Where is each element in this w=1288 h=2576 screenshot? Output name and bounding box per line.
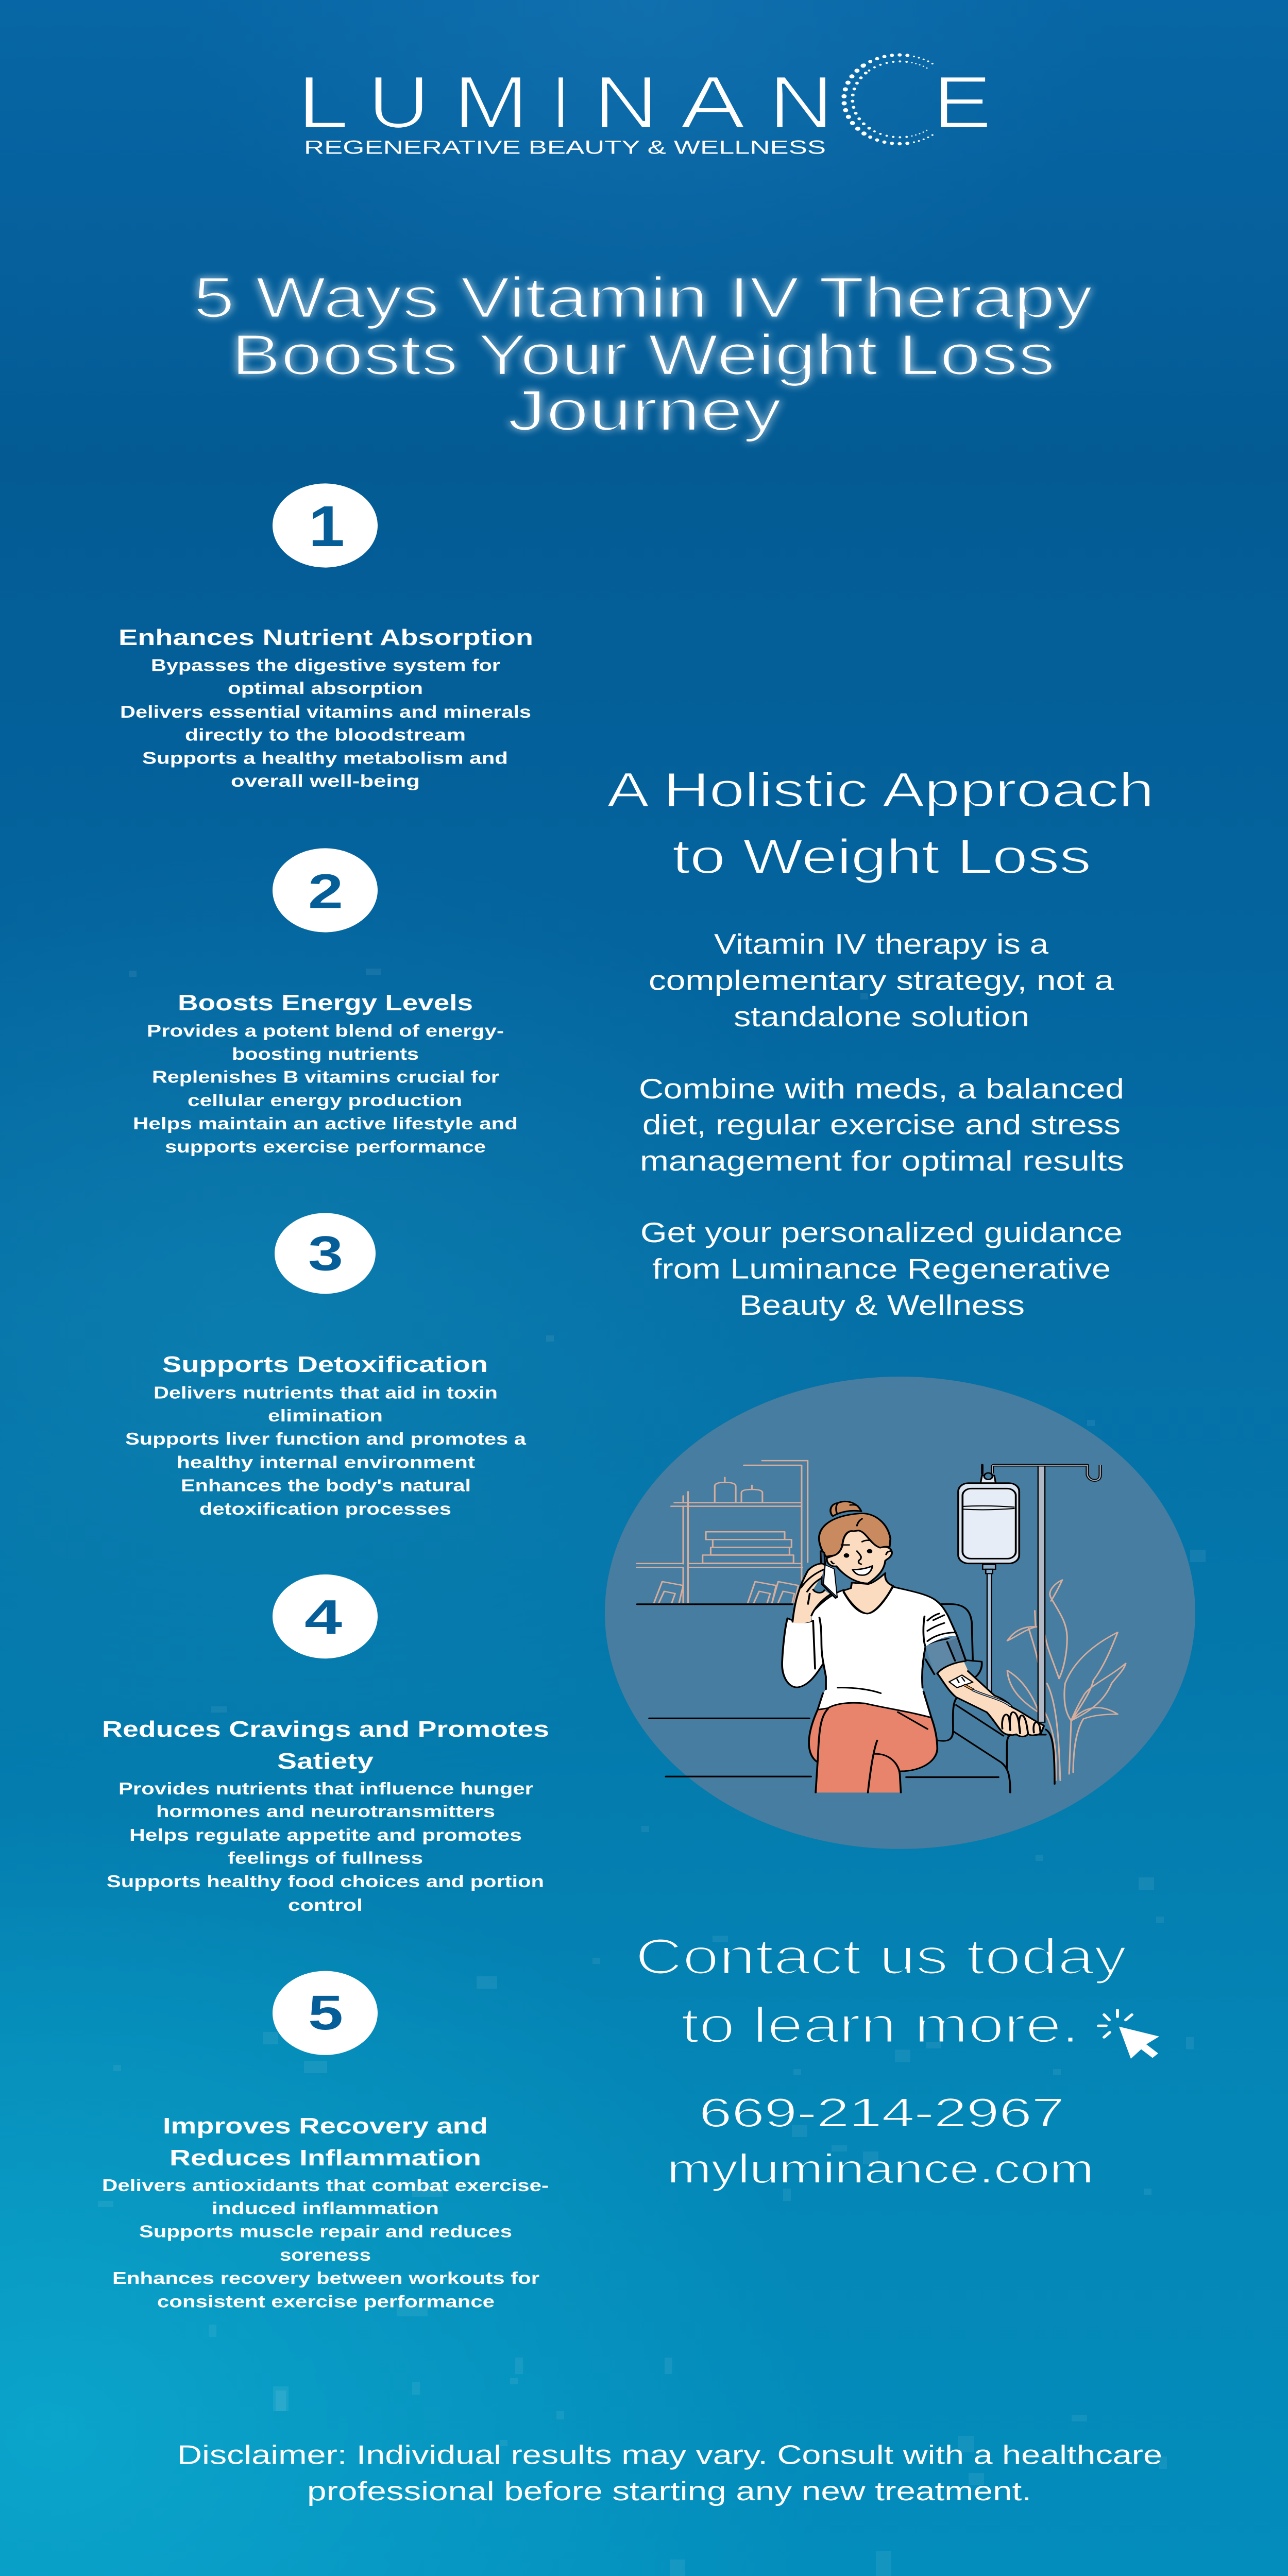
panel: way 2 bbox=[133, 848, 518, 1157]
text block 3: elimination bbox=[268, 1406, 383, 1426]
text block 5: Enhances recovery between workouts for bbox=[112, 2269, 539, 2288]
panel: way 4 bbox=[102, 1574, 549, 1915]
website: myluminance.com bbox=[667, 2146, 1094, 2192]
holistic paragraph 1 bbox=[649, 929, 1114, 1032]
holistic paragraph 2: diet, regular exercise and stress bbox=[642, 1109, 1121, 1141]
contact heading bbox=[635, 1929, 1127, 2053]
text block 2 bbox=[133, 1022, 518, 1157]
number badge 4: 4 bbox=[304, 1590, 342, 1645]
logo wordmark bbox=[297, 60, 992, 144]
text block 2: cellular energy production bbox=[188, 1091, 462, 1110]
heading 4: Reduces Cravings and Promotes bbox=[102, 1716, 549, 1742]
holistic paragraph 3: Beauty & Wellness bbox=[739, 1290, 1025, 1321]
panel: way 5 bbox=[102, 1971, 549, 2311]
text block 4: Provides nutrients that influence hunger bbox=[118, 1780, 533, 1799]
number badge 4 bbox=[273, 1574, 378, 1658]
logo wordmark: M bbox=[453, 60, 529, 144]
text block 2: Replenishes B vitamins crucial for bbox=[152, 1067, 499, 1087]
text block 5: consistent exercise performance bbox=[157, 2292, 495, 2311]
number badge 3: 3 bbox=[308, 1226, 343, 1281]
number badge 3 bbox=[275, 1213, 376, 1294]
heading 4 bbox=[102, 1716, 549, 1774]
number badge 5: 5 bbox=[308, 1986, 343, 2040]
title: Boosts Your Weight Loss bbox=[231, 323, 1055, 387]
logo wordmark: N bbox=[594, 60, 658, 144]
heading 5: Improves Recovery and bbox=[163, 2113, 488, 2139]
title: 5 Ways Vitamin IV Therapy bbox=[193, 265, 1093, 330]
text block 5: Supports muscle repair and reduces bbox=[139, 2222, 512, 2241]
woman head, phone and hand bbox=[792, 1501, 893, 1623]
panel: way 1 bbox=[118, 483, 533, 791]
text block 4: Helps regulate appetite and promotes bbox=[129, 1826, 522, 1845]
text block 4: feelings of fullness bbox=[228, 1849, 423, 1868]
hair bun bbox=[831, 1501, 861, 1516]
text block 1: Supports a healthy metabolism and bbox=[142, 749, 508, 768]
text block 2: Provides a potent blend of energy- bbox=[147, 1022, 504, 1041]
logo wordmark: E bbox=[933, 60, 992, 144]
holistic paragraph 1: complementary strategy, not a bbox=[649, 965, 1114, 996]
text block 2: supports exercise performance bbox=[165, 1138, 486, 1157]
heading 1: Enhances Nutrient Absorption bbox=[118, 624, 533, 650]
illustration backdrop circle bbox=[605, 1377, 1195, 1849]
trousers bbox=[809, 1703, 937, 1792]
title: Journey bbox=[507, 378, 782, 443]
text block 1: optimal absorption bbox=[228, 679, 423, 698]
logo bbox=[297, 55, 992, 158]
panel: way 3 bbox=[125, 1213, 527, 1519]
number badge 2: 2 bbox=[308, 864, 343, 919]
holistic paragraph 3: from Luminance Regenerative bbox=[652, 1253, 1111, 1285]
logo wordmark: L bbox=[297, 60, 349, 144]
text block 3: detoxification processes bbox=[199, 1500, 451, 1519]
text block 1: overall well-being bbox=[231, 772, 420, 791]
holistic heading bbox=[607, 762, 1154, 884]
text block 2: boosting nutrients bbox=[232, 1045, 419, 1064]
holistic paragraph 2: Combine with meds, a balanced bbox=[639, 1073, 1124, 1105]
holistic heading: to Weight Loss bbox=[672, 829, 1091, 884]
contact heading: to learn more. bbox=[681, 1997, 1079, 2053]
text block 3: Supports liver function and promotes a bbox=[125, 1430, 527, 1449]
IV pole bbox=[982, 1465, 1100, 1722]
blood pressure cuff bbox=[925, 1636, 966, 1674]
forearm with IV line bbox=[937, 1661, 1044, 1737]
white top bbox=[782, 1587, 957, 1718]
text block 3 bbox=[125, 1383, 527, 1519]
face bbox=[827, 1531, 892, 1583]
neck bbox=[843, 1573, 893, 1614]
text block 4: Supports healthy food choices and portion bbox=[107, 1872, 544, 1891]
chair bbox=[938, 1604, 1055, 1792]
text block 1: Delivers essential vitamins and minerals bbox=[120, 703, 531, 722]
woman lower body bbox=[782, 1587, 1044, 1792]
holistic paragraph 3: Get your personalized guidance bbox=[640, 1217, 1123, 1249]
phone bbox=[821, 1551, 837, 1598]
number badge 1: 1 bbox=[309, 494, 345, 558]
text block 4: control bbox=[288, 1896, 363, 1915]
disclaimer: Disclaimer: Individual results may vary. Consult with a healthcare bbox=[177, 2440, 1162, 2470]
phone number: 669-214-2967 bbox=[699, 2090, 1064, 2136]
bookshelf and room lines bbox=[637, 1461, 998, 1777]
number badge 2 bbox=[273, 848, 378, 933]
logo wordmark: U bbox=[368, 60, 430, 144]
text block 5: soreness bbox=[280, 2246, 371, 2265]
holistic paragraph 3 bbox=[640, 1217, 1123, 1321]
holistic heading: A Holistic Approach bbox=[607, 762, 1154, 817]
text block 2: Helps maintain an active lifestyle and bbox=[133, 1114, 518, 1133]
heading 3: Supports Detoxification bbox=[162, 1351, 488, 1377]
plant bbox=[1007, 1580, 1126, 1781]
icon: cursor click bbox=[1098, 2010, 1159, 2059]
text block 1: directly to the bloodstream bbox=[185, 725, 466, 745]
text block 5: Delivers antioxidants that combat exercise- bbox=[102, 2176, 549, 2195]
facial features bbox=[831, 1504, 891, 1575]
text block 4: hormones and neurotransmitters bbox=[156, 1802, 495, 1821]
logo dotted letter C bbox=[844, 55, 934, 144]
logo wordmark: N bbox=[769, 60, 834, 144]
contact heading: Contact us today bbox=[635, 1929, 1127, 1985]
heading 2: Boosts Energy Levels bbox=[178, 990, 473, 1015]
call to action bbox=[635, 1929, 1159, 2192]
heading 4: Satiety bbox=[277, 1748, 374, 1774]
text block 1 bbox=[120, 656, 531, 791]
text block 3: healthy internal environment bbox=[177, 1453, 475, 1472]
disclaimer bbox=[177, 2440, 1162, 2506]
IV bag bbox=[958, 1473, 1019, 1573]
text block 3: Delivers nutrients that aid in toxin bbox=[154, 1383, 498, 1402]
hair bbox=[819, 1513, 890, 1556]
text block 5 bbox=[102, 2176, 549, 2311]
logo wordmark: I bbox=[551, 60, 570, 144]
holistic paragraph 1: standalone solution bbox=[734, 1001, 1029, 1032]
text block 4 bbox=[107, 1780, 544, 1915]
holistic paragraph 2 bbox=[639, 1073, 1124, 1177]
text block 5: induced inflammation bbox=[212, 2199, 439, 2218]
hand holding phone bbox=[792, 1564, 831, 1623]
heading 5: Reduces Inflammation bbox=[170, 2145, 481, 2171]
illustration: woman receiving IV therapy bbox=[605, 1377, 1195, 1849]
number badge 5 bbox=[273, 1971, 378, 2055]
holistic paragraph 2: management for optimal results bbox=[640, 1145, 1124, 1177]
holistic paragraph 1: Vitamin IV therapy is a bbox=[714, 929, 1049, 960]
logo wordmark: A bbox=[680, 60, 745, 144]
text block 1: Bypasses the digestive system for bbox=[151, 656, 500, 675]
logo tagline: REGENERATIVE BEAUTY & WELLNESS bbox=[304, 137, 826, 158]
number badge 1 bbox=[273, 483, 378, 568]
heading 5 bbox=[163, 2113, 488, 2171]
panel: holistic approach bbox=[607, 762, 1154, 1321]
text block 3: Enhances the body's natural bbox=[181, 1476, 471, 1495]
title bbox=[193, 265, 1093, 443]
disclaimer: professional before starting any new treatment. bbox=[307, 2477, 1031, 2506]
